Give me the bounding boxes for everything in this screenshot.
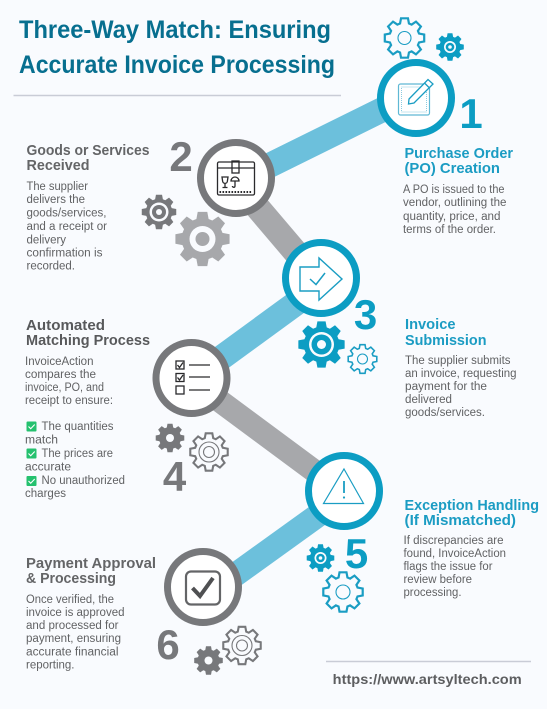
- text: payment approval: reporting.: [26, 660, 74, 672]
- text: exception handling: found, InvoiceAction: [404, 548, 506, 560]
- text: automated matching: The prices are: [42, 448, 113, 460]
- gears near step 2: [142, 195, 230, 266]
- connector bars: [192, 93, 416, 598]
- step numbers: 2: [169, 133, 193, 180]
- step numbers: 1: [459, 90, 483, 137]
- gears near step 5: [307, 544, 363, 612]
- step 3 node: arrow check icon: [286, 242, 356, 314]
- text: invoice submission: Invoice: [405, 316, 456, 333]
- text: exception handling: flags the issue for: [404, 561, 493, 573]
- step numbers: 4: [163, 453, 187, 500]
- text: automated matching: [25, 317, 150, 500]
- text: automated matching: receipt to ensure:: [25, 395, 113, 407]
- text: goods received: goods/services,: [26, 208, 106, 220]
- text: goods received: and a receipt or: [26, 221, 107, 233]
- step 4 node: checklist icon: [156, 342, 227, 414]
- text: automated matching: accurate: [25, 462, 71, 474]
- text: exception handling: If discrepancies are: [404, 535, 504, 547]
- footer url: https://www.artsyltech.com: [333, 672, 522, 687]
- text: purchase order: [403, 145, 513, 236]
- text: automated matching: match: [25, 434, 58, 446]
- step 1 node: pencil icon: [380, 62, 452, 134]
- text: purchase order: (PO) Creation: [404, 160, 500, 177]
- text: goods received: delivery: [26, 234, 66, 246]
- text: payment approval: Once verified, the: [26, 594, 114, 606]
- text: goods received: Received: [26, 157, 90, 174]
- step numbers: 5: [345, 530, 368, 577]
- text: exception handling: processing.: [404, 587, 462, 599]
- gears near step 1: [385, 18, 464, 61]
- text: goods received: recorded.: [26, 260, 75, 272]
- text: invoice submission: The supplier submits: [405, 355, 511, 367]
- text: invoice submission: [405, 316, 516, 419]
- text: automated matching: Matching Process: [26, 332, 150, 349]
- gears near step 6: [194, 627, 261, 675]
- text: automated matching: compares the: [25, 369, 96, 381]
- text: payment approval: invoice is approved: [26, 607, 124, 619]
- title: [19, 16, 335, 79]
- text: automated matching: charges: [25, 488, 66, 500]
- text: payment approval: and processed for: [26, 620, 119, 632]
- text: automated matching: Automated: [26, 317, 105, 334]
- text: automated matching: InvoiceAction: [25, 356, 93, 368]
- text: exception handling: Exception Handling: [404, 497, 539, 514]
- text: automated matching: No unauthorized: [42, 475, 125, 487]
- text: goods received: delivers the: [26, 194, 85, 206]
- text: purchase order: terms of the order.: [403, 224, 496, 236]
- text: payment approval: [26, 555, 156, 672]
- text: invoice submission: an invoice, requesting: [405, 368, 516, 380]
- text: exception handling: [404, 497, 539, 599]
- text: payment approval: payment, ensuring: [26, 633, 121, 645]
- text: invoice submission: delivered: [405, 394, 452, 406]
- text: payment approval: Payment Approval: [26, 555, 156, 572]
- step numbers: 6: [156, 621, 180, 668]
- text: purchase order: quantity, price, and: [403, 211, 500, 223]
- text: purchase order: A PO is issued to the: [403, 184, 504, 196]
- title: Accurate Invoice Processing: [19, 51, 335, 79]
- text: goods received: [26, 142, 150, 272]
- step 2 node: box icon: [200, 142, 272, 214]
- text: goods received: The supplier: [26, 181, 88, 193]
- text: goods received: Goods or Services: [26, 142, 150, 159]
- step numbers: [156, 90, 483, 668]
- step 5 node: warning icon: [308, 456, 380, 526]
- text: invoice submission: payment for the: [405, 381, 487, 393]
- text: purchase order: Purchase Order: [404, 145, 513, 162]
- step 6 node: checkbox icon: [168, 552, 238, 622]
- text: invoice submission: goods/services.: [405, 407, 485, 419]
- text: payment approval: & Processing: [26, 570, 116, 587]
- gears near step 4: [156, 424, 228, 471]
- text: invoice submission: Submission: [405, 332, 486, 349]
- title: Three-Way Match: Ensuring: [19, 16, 331, 44]
- text: exception handling: review before: [404, 574, 472, 586]
- text: automated matching: The quantities: [42, 421, 114, 433]
- text: automated matching: invoice, PO, and: [25, 382, 104, 394]
- text: goods received: confirmation is: [26, 248, 103, 260]
- text: exception handling: (If Mismatched): [404, 512, 516, 529]
- icons: green checkmarks: [26, 422, 36, 486]
- text: payment approval: accurate financial: [26, 646, 118, 658]
- text: purchase order: vendor, outlining the: [403, 197, 506, 209]
- step numbers: 3: [354, 291, 377, 338]
- gears near step 3: [298, 321, 377, 373]
